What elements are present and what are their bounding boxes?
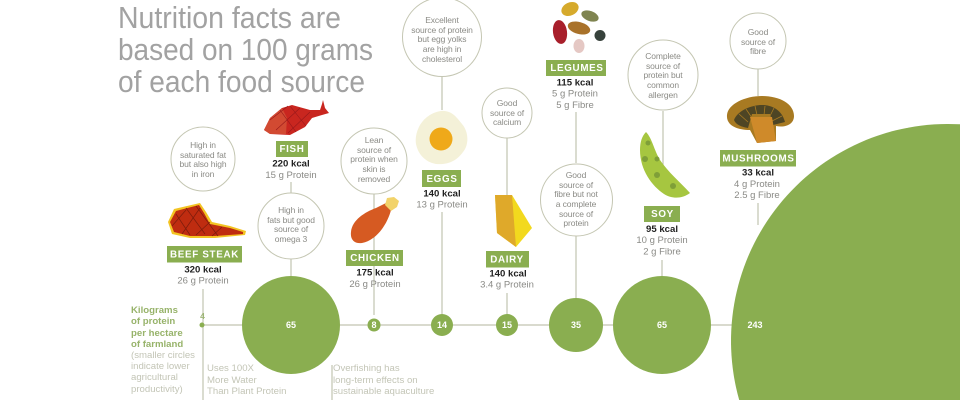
note: soy <box>628 40 698 110</box>
label: eggs <box>422 170 461 187</box>
icon: legumes <box>551 0 606 53</box>
note: soy: Complete <box>645 51 681 61</box>
bubble: 65 <box>242 276 340 374</box>
note: dairy: Good <box>497 98 518 108</box>
note: soy: protein but <box>643 70 683 80</box>
stats: soy: 10 g Protein <box>636 235 688 246</box>
stats: eggs: 13 g Protein <box>416 200 468 210</box>
note: chicken: removed <box>358 174 391 184</box>
label: dairy <box>486 251 529 268</box>
bubble: 65: 65 <box>657 320 667 330</box>
stats: chicken: 26 g Protein <box>349 279 401 290</box>
note: beef water use: Uses 100X <box>207 363 255 374</box>
bubble: 15 <box>496 314 518 336</box>
label: soy: SOY <box>651 209 674 220</box>
note: beef: saturated fat <box>180 150 227 160</box>
stats: fish: 15 g Protein <box>265 170 317 181</box>
note: mushrooms: fibre <box>750 46 766 56</box>
stats: beef <box>177 264 229 286</box>
stats: dairy: 140 kcal <box>489 268 527 280</box>
bubble: 14: 14 <box>437 320 447 330</box>
axis legend: per hectare <box>131 328 183 339</box>
note: chicken: skin is <box>363 164 385 174</box>
icon: soy pod <box>640 132 690 198</box>
note: legumes: protein <box>563 218 589 228</box>
label: mushrooms <box>720 150 796 166</box>
stats: fish: 220 kcal <box>272 158 310 170</box>
bubble: 65 <box>613 276 711 374</box>
stats: mushrooms: 2.5 g Fibre <box>734 190 780 201</box>
title: of each food source <box>118 64 365 99</box>
label: beef steak <box>167 246 242 262</box>
axis legend: of protein <box>131 316 175 327</box>
stats: beef: 320 kcal <box>184 264 222 276</box>
note: beef water use: More Water <box>207 375 258 386</box>
note: fish: source of <box>274 224 309 234</box>
icon: fried egg <box>416 111 467 164</box>
axis legend: productivity) <box>131 384 183 395</box>
note: dairy: calcium <box>493 117 521 127</box>
note: soy: common <box>647 80 679 90</box>
bubble: 8: 8 <box>371 320 377 330</box>
note: beef: High in <box>190 140 216 150</box>
note: chicken: source of <box>357 145 392 155</box>
note: legumes: a complete <box>556 199 597 209</box>
note: mushrooms: source of <box>741 37 776 47</box>
note: overfishing: sustainable aquaculture <box>333 386 434 397</box>
note: beef water use: Than Plant Protein <box>207 386 286 397</box>
icon: beef steak <box>168 203 246 238</box>
mushrooms column <box>720 13 796 330</box>
icon: mushroom <box>727 96 794 143</box>
stats: chicken <box>349 268 401 290</box>
icon: fish <box>264 100 329 135</box>
axis legend: of farmland <box>131 339 183 350</box>
note: legumes: fibre but not <box>554 189 599 199</box>
beef steak column <box>167 127 246 286</box>
note: mushrooms <box>730 13 786 69</box>
note: eggs: cholesterol <box>422 54 462 64</box>
fish column <box>242 100 340 374</box>
note: legumes: Good <box>566 170 587 180</box>
icon: cheese <box>495 195 532 247</box>
label: dairy: DAIRY <box>490 254 524 266</box>
note: legumes <box>540 164 612 236</box>
stats: soy: 95 kcal <box>646 224 678 235</box>
bubble: 65: 65 <box>286 320 296 330</box>
eggs column <box>402 0 482 336</box>
axis legend: indicate lower <box>131 361 190 372</box>
note: mushrooms: Good <box>748 27 769 37</box>
stats: dairy <box>480 268 534 290</box>
bubble: 35: 35 <box>571 320 581 330</box>
label: fish <box>276 141 308 157</box>
stats: beef: 26 g Protein <box>177 276 229 286</box>
stats: mushrooms <box>734 168 780 201</box>
stats: dairy: 3.4 g Protein <box>480 280 534 290</box>
note: legumes: source of <box>559 209 594 219</box>
label: soy <box>644 206 680 222</box>
stats: mushrooms: 4 g Protein <box>734 179 780 190</box>
stats: mushrooms: 33 kcal <box>742 168 774 178</box>
label: fish: FISH <box>279 144 305 155</box>
stats: legumes: 5 g Fibre <box>556 100 594 111</box>
note: beef: in iron <box>192 169 215 179</box>
note: fish: omega 3 <box>275 234 308 244</box>
note: soy: source of <box>646 61 681 71</box>
value: 243: 243 <box>747 320 763 330</box>
bubble: 15: 15 <box>502 320 512 330</box>
note: eggs <box>402 0 482 76</box>
axis start: 4: 4 <box>200 311 205 321</box>
stats: chicken: 175 kcal <box>356 268 394 278</box>
label: legumes: LEGUMES <box>550 63 604 74</box>
note: soy: allergen <box>648 90 678 100</box>
title: Nutrition facts are <box>118 0 341 35</box>
axis legend <box>131 305 195 395</box>
label: eggs: EGGS <box>426 174 458 185</box>
stats: eggs: 140 kcal <box>423 188 461 200</box>
note: legumes: source of <box>559 180 594 190</box>
bubble: 14 <box>431 314 453 336</box>
label: mushrooms: MUSHROOMS <box>722 154 795 164</box>
note: dairy: source of <box>490 108 525 118</box>
stats: soy: 2 g Fibre <box>643 246 681 258</box>
note: chicken: Lean <box>365 135 384 145</box>
label: chicken: CHICKEN <box>350 253 400 264</box>
stats: legumes: 5 g Protein <box>552 88 598 100</box>
bubble: 8 <box>368 318 380 332</box>
stats: soy <box>636 224 688 258</box>
title: based on 100 grams <box>118 32 373 67</box>
note: beef <box>171 127 235 191</box>
note: dairy <box>482 88 532 138</box>
chicken column <box>341 128 407 332</box>
bubble: 35 <box>549 298 603 352</box>
soy column <box>613 40 711 374</box>
axis start: 4 <box>200 311 205 328</box>
icon: chicken drumstick <box>351 197 399 243</box>
big circle: 243 <box>731 124 960 400</box>
dairy column <box>480 88 534 336</box>
stats: fish <box>265 158 317 181</box>
axis legend: agricultural <box>131 372 178 383</box>
note: beef: but also high <box>180 159 227 169</box>
stats: eggs <box>416 188 468 210</box>
note: fish: fats but good <box>267 215 315 225</box>
note: eggs: source of protein <box>411 25 473 35</box>
note: overfishing: long-term effects on <box>333 375 418 386</box>
legumes column <box>540 0 612 352</box>
label: legumes <box>546 60 606 76</box>
note: chicken: protein when <box>350 154 398 164</box>
note: overfishing: Overfishing has <box>333 363 400 374</box>
stats: legumes: 115 kcal <box>557 78 593 88</box>
note: eggs: are high in <box>423 44 462 54</box>
note: eggs: but egg yolks <box>418 34 466 44</box>
stats: legumes <box>552 78 598 111</box>
note: chicken <box>341 128 407 194</box>
label: beef steak: BEEF STEAK <box>170 250 239 260</box>
note: eggs: Excellent <box>425 15 460 25</box>
note: fish: High in <box>278 205 304 215</box>
axis legend: Kilograms <box>131 305 178 316</box>
label: chicken <box>346 250 403 266</box>
axis legend: (smaller circles <box>131 350 195 361</box>
note: fish <box>258 193 324 259</box>
